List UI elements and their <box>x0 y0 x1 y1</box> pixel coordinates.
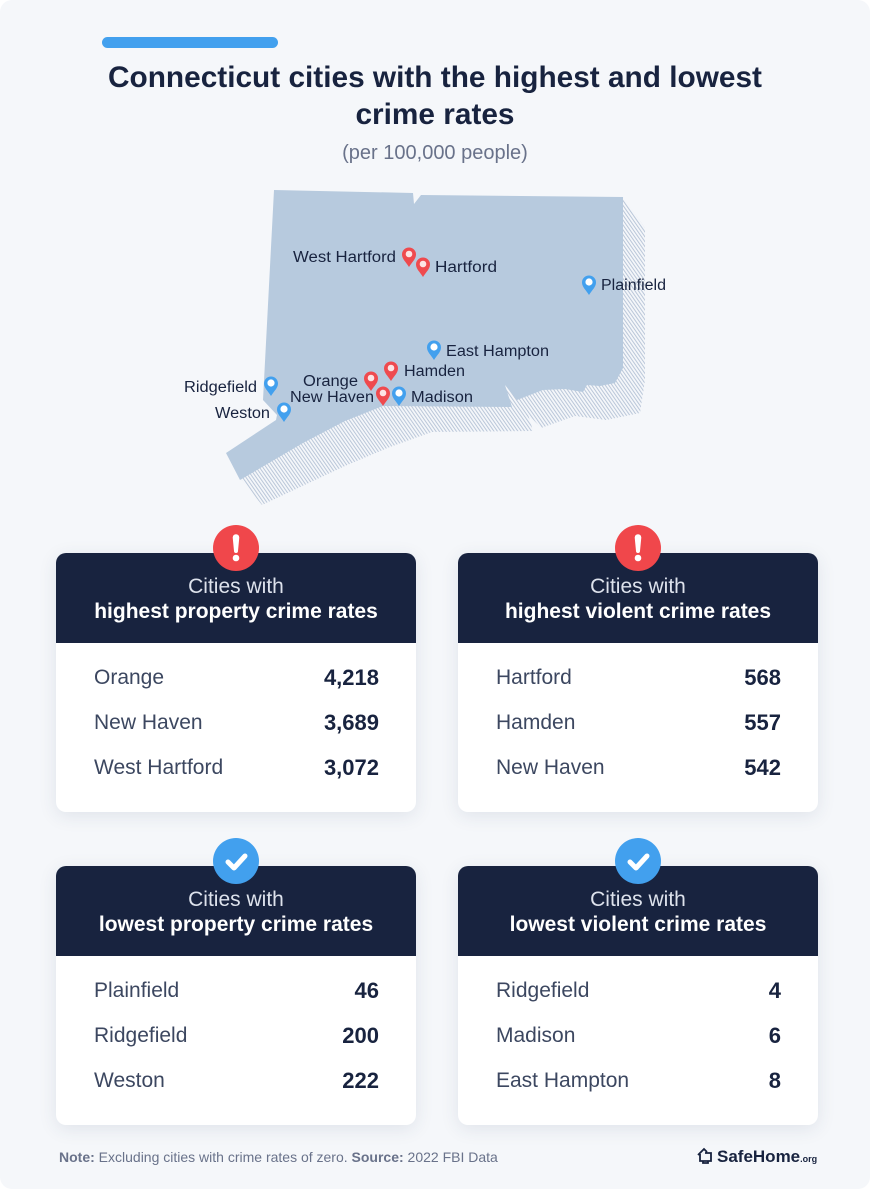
panel header: Cities with <box>188 575 284 598</box>
accent bar <box>102 37 278 48</box>
row: Hartford <box>496 665 781 690</box>
row: New Haven <box>94 710 379 735</box>
map of Connecticut <box>184 190 666 505</box>
panel header <box>458 553 818 643</box>
map labels: Hamden <box>404 363 465 380</box>
row: West Hartford: West Hartford <box>94 756 223 779</box>
pin: New Haven <box>376 386 390 406</box>
row: Ridgefield: 4 <box>769 978 781 1003</box>
row: Plainfield: Plainfield <box>94 979 179 1002</box>
map labels: Plainfield <box>601 277 666 294</box>
pin: Orange <box>364 372 378 391</box>
pin: Hartford <box>416 258 430 277</box>
panel: lowest violent crime <box>458 866 818 1125</box>
row: New Haven: 542 <box>744 755 781 780</box>
pin: Madison <box>392 386 406 406</box>
map labels: New Haven <box>290 389 374 406</box>
map labels: Weston <box>215 405 270 422</box>
map labels: Orange <box>303 373 358 390</box>
row: Weston: 222 <box>342 1068 379 1093</box>
icon: check <box>213 838 259 884</box>
map labels: East Hampton <box>446 343 549 360</box>
state shape <box>226 190 623 480</box>
row: Hamden <box>496 710 781 735</box>
row: New Haven: New Haven <box>94 711 203 734</box>
panel header <box>56 866 416 956</box>
row: Ridgefield <box>496 978 781 1003</box>
title <box>108 61 762 131</box>
row: Madison: 6 <box>769 1023 781 1048</box>
row: Hamden: 557 <box>744 710 781 735</box>
row: Orange: 4,218 <box>324 665 379 690</box>
panel header: lowest property crime rates <box>99 913 373 936</box>
row: Ridgefield: Ridgefield <box>496 979 589 1002</box>
panel: highest property crime <box>56 553 416 812</box>
row: Hamden: Hamden <box>496 711 575 734</box>
row: West Hartford <box>94 755 379 780</box>
row: Ridgefield: Ridgefield <box>94 1024 187 1047</box>
row: East Hampton <box>496 1068 781 1093</box>
panel header: Cities with <box>590 575 686 598</box>
panel header: highest violent crime rates <box>505 600 771 623</box>
title: Connecticut cities with the highest and lowest <box>108 61 762 94</box>
panel header: lowest violent crime rates <box>510 913 766 936</box>
row: Orange <box>94 665 379 690</box>
panel: highest violent crime <box>458 553 818 812</box>
logo wordmark: SafeHome.org <box>717 1147 817 1166</box>
footnote: Note: Excluding cities with crime rates of zero. Source: 2022 FBI Data <box>59 1149 498 1165</box>
title: crime rates <box>355 98 515 131</box>
row: West Hartford: 3,072 <box>324 755 379 780</box>
subtitle: (per 100,000 people) <box>342 142 528 164</box>
icon: check <box>615 838 661 884</box>
map labels: Hartford <box>435 259 497 276</box>
row: Orange: Orange <box>94 666 164 689</box>
icon: alert <box>615 525 661 571</box>
icon: alert <box>213 525 259 571</box>
row: Madison: Madison <box>496 1024 575 1047</box>
map labels: Madison <box>411 389 473 406</box>
row: New Haven: New Haven <box>496 756 605 779</box>
row: Weston <box>94 1068 379 1093</box>
row: Hartford: Hartford <box>496 666 572 689</box>
panel header <box>458 866 818 956</box>
panel header <box>56 553 416 643</box>
row: Ridgefield: 200 <box>342 1023 379 1048</box>
pin: Hamden <box>384 362 398 381</box>
row: Weston: Weston <box>94 1069 165 1092</box>
map hatch shadow <box>240 197 645 505</box>
row: Hartford: 568 <box>744 665 781 690</box>
pin: Ridgefield <box>264 376 278 396</box>
row: Plainfield <box>94 978 379 1003</box>
pin: Plainfield <box>582 276 596 295</box>
row: New Haven <box>496 755 781 780</box>
row: Ridgefield <box>94 1023 379 1048</box>
row: Madison <box>496 1023 781 1048</box>
panel header: Cities with <box>188 888 284 911</box>
logo: SafeHome.org <box>697 1147 817 1166</box>
pin: West Hartford <box>402 248 416 267</box>
pin: Weston <box>277 402 291 422</box>
row: New Haven: 3,689 <box>324 710 379 735</box>
row: East Hampton: East Hampton <box>496 1069 629 1092</box>
map labels <box>184 249 666 422</box>
icon: house <box>697 1148 712 1164</box>
row: Plainfield: 46 <box>355 978 379 1003</box>
panel: lowest property crime <box>56 866 416 1125</box>
panel header: Cities with <box>590 888 686 911</box>
map labels: West Hartford <box>293 249 396 266</box>
row: East Hampton: 8 <box>769 1068 781 1093</box>
pin: East Hampton <box>427 340 441 360</box>
map labels: Ridgefield <box>184 379 257 396</box>
panel header: highest property crime rates <box>94 600 378 623</box>
